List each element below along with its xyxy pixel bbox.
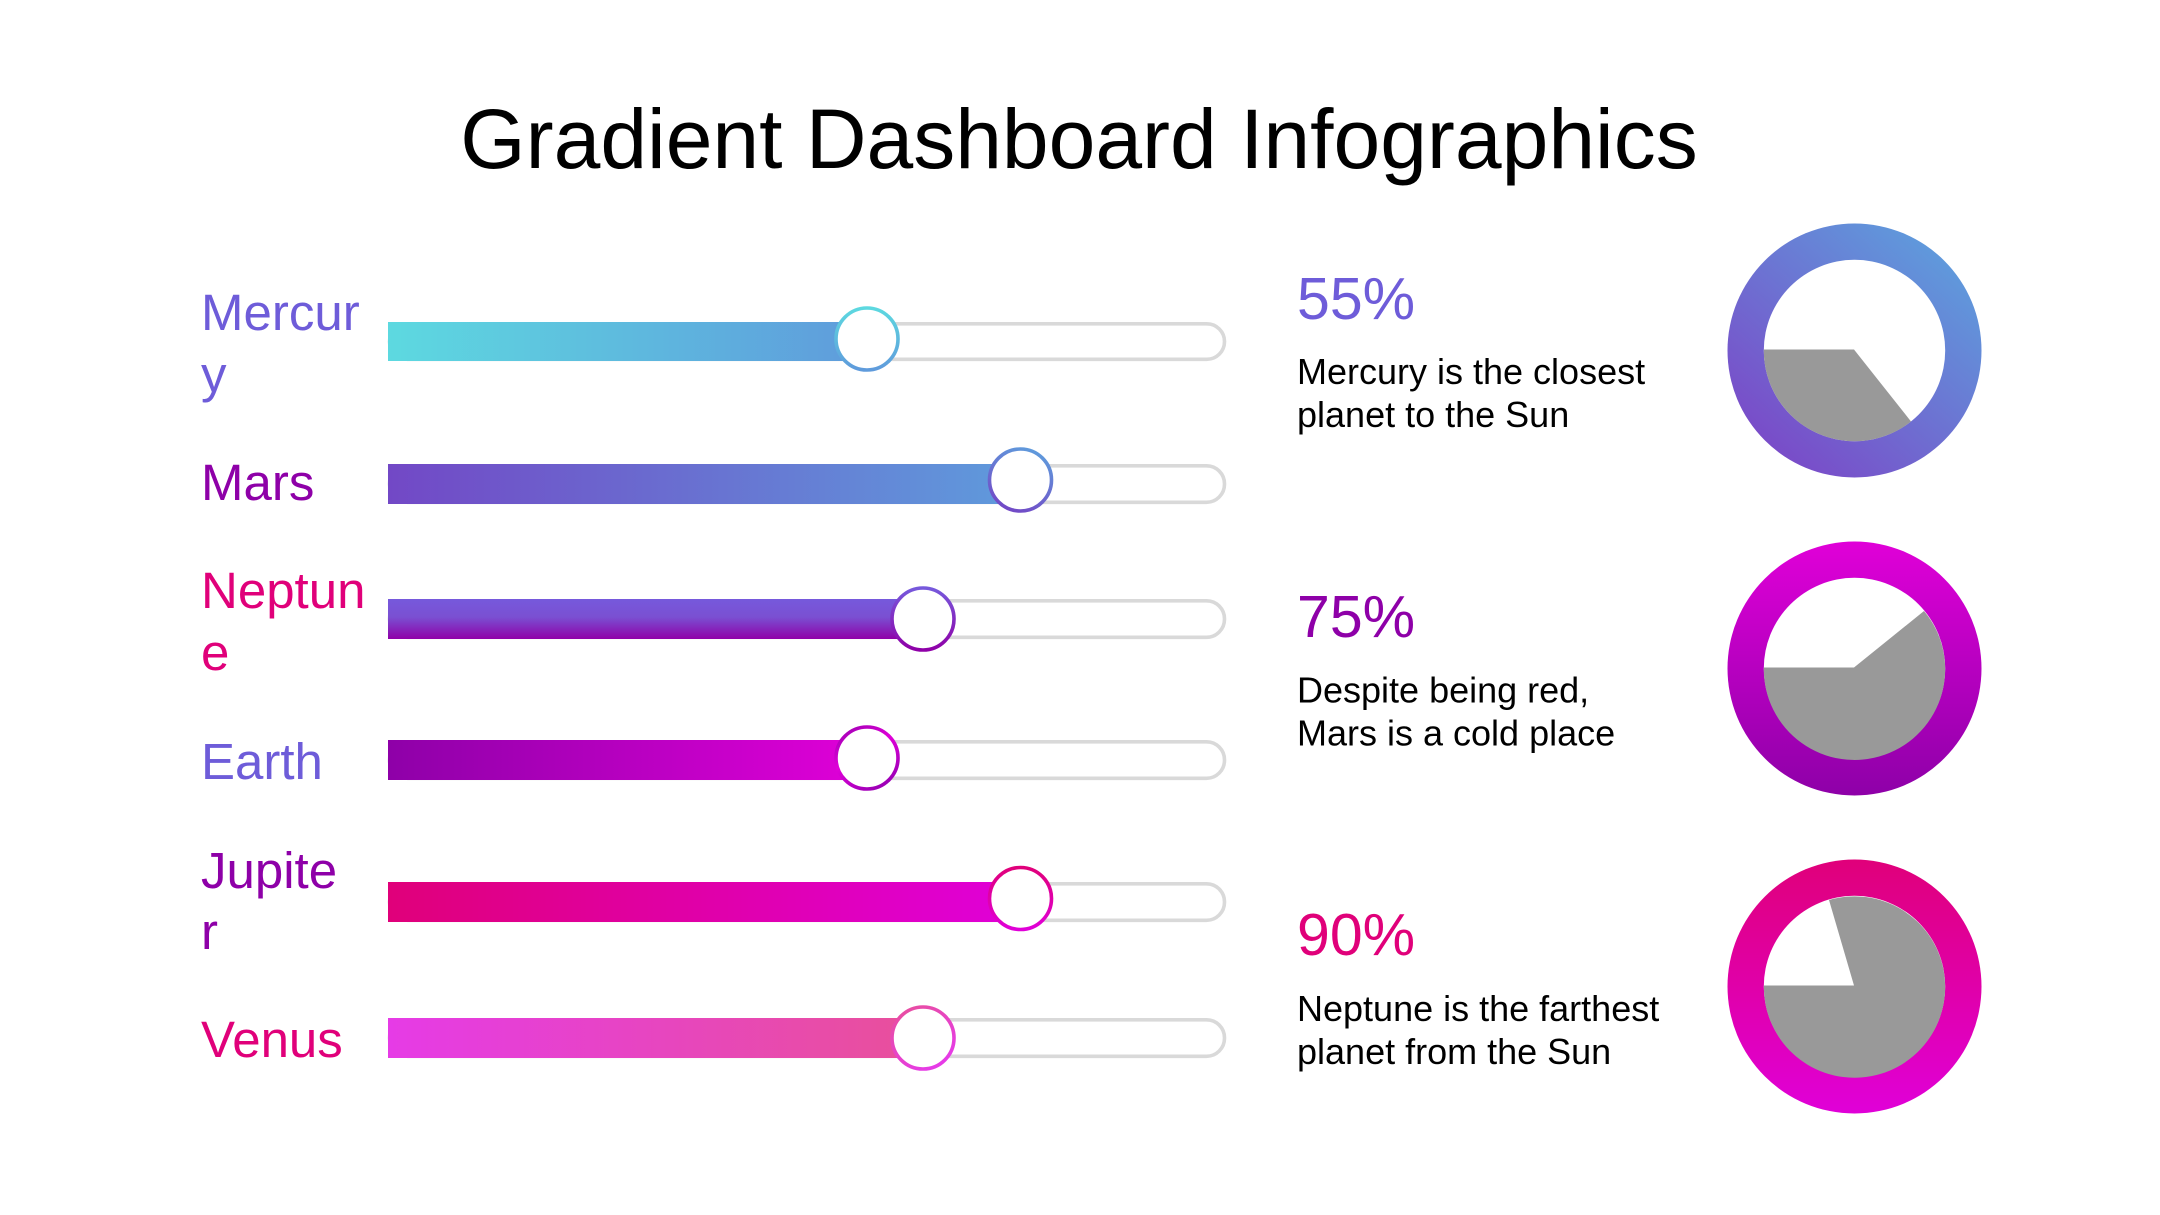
slider knob	[892, 1007, 954, 1069]
slider fill	[388, 599, 923, 639]
slider knob	[836, 727, 898, 789]
slider track	[390, 466, 1224, 502]
donut chart: 75%	[1728, 542, 1982, 796]
description: Neptune: Neptune is the farthest	[1297, 988, 1659, 1029]
label: Earth: Earth	[201, 733, 323, 790]
description: Mercury: planet to the Sun	[1297, 394, 1569, 435]
description: Mars: Despite being red,	[1297, 670, 1589, 710]
description: Mercury: Mercury is the closest	[1297, 351, 1645, 392]
slider fill	[388, 322, 867, 361]
slider fill	[388, 882, 1020, 922]
donut chart: 90%	[1728, 860, 1982, 1114]
slider knob	[836, 308, 898, 370]
panel: slider rows	[201, 284, 1224, 1069]
label: Neptune: Neptun	[201, 562, 365, 619]
donut chart: 55%	[1728, 224, 1982, 478]
slider row: Jupiter	[201, 842, 1224, 960]
label: Mercury: Mercur	[201, 284, 360, 341]
slider track	[390, 1020, 1224, 1056]
slider knob	[990, 449, 1052, 511]
label: Jupiter: Jupite	[201, 842, 337, 899]
title: Gradient Dashboard Infographics	[460, 92, 1698, 186]
slider track	[390, 601, 1224, 637]
label: Mars: Mars	[201, 454, 314, 511]
percentage: 75%: 75%	[1297, 584, 1415, 650]
slider row: Earth	[201, 727, 1224, 790]
panel: stat Mercury	[1297, 224, 1982, 478]
description: Neptune: planet from the Sun	[1297, 1031, 1611, 1072]
percentage: 90%: 90%	[1297, 902, 1415, 968]
label: Mercury: y	[201, 346, 227, 403]
slider knob	[990, 868, 1052, 930]
slider fill	[388, 464, 1020, 504]
slider fill	[388, 740, 867, 780]
slider fill	[388, 1018, 923, 1058]
slider row: Neptune	[201, 562, 1224, 681]
slider track	[390, 742, 1224, 778]
label: Venus: Venus	[201, 1011, 343, 1068]
label: Jupiter: r	[201, 903, 218, 960]
percentage: 55%: 55%	[1297, 266, 1415, 332]
slider row: Mercury	[201, 284, 1224, 403]
description: Mars: Mars is a cold place	[1297, 712, 1615, 754]
panel: stat Mars	[1297, 542, 1982, 796]
slider row: Mars	[201, 449, 1224, 511]
panel: stat Neptune	[1297, 860, 1982, 1114]
slider row: Venus	[201, 1007, 1224, 1069]
label: Neptune: e	[201, 624, 229, 681]
slider track	[390, 324, 1224, 359]
slider knob	[892, 588, 954, 650]
slider track	[390, 884, 1224, 920]
